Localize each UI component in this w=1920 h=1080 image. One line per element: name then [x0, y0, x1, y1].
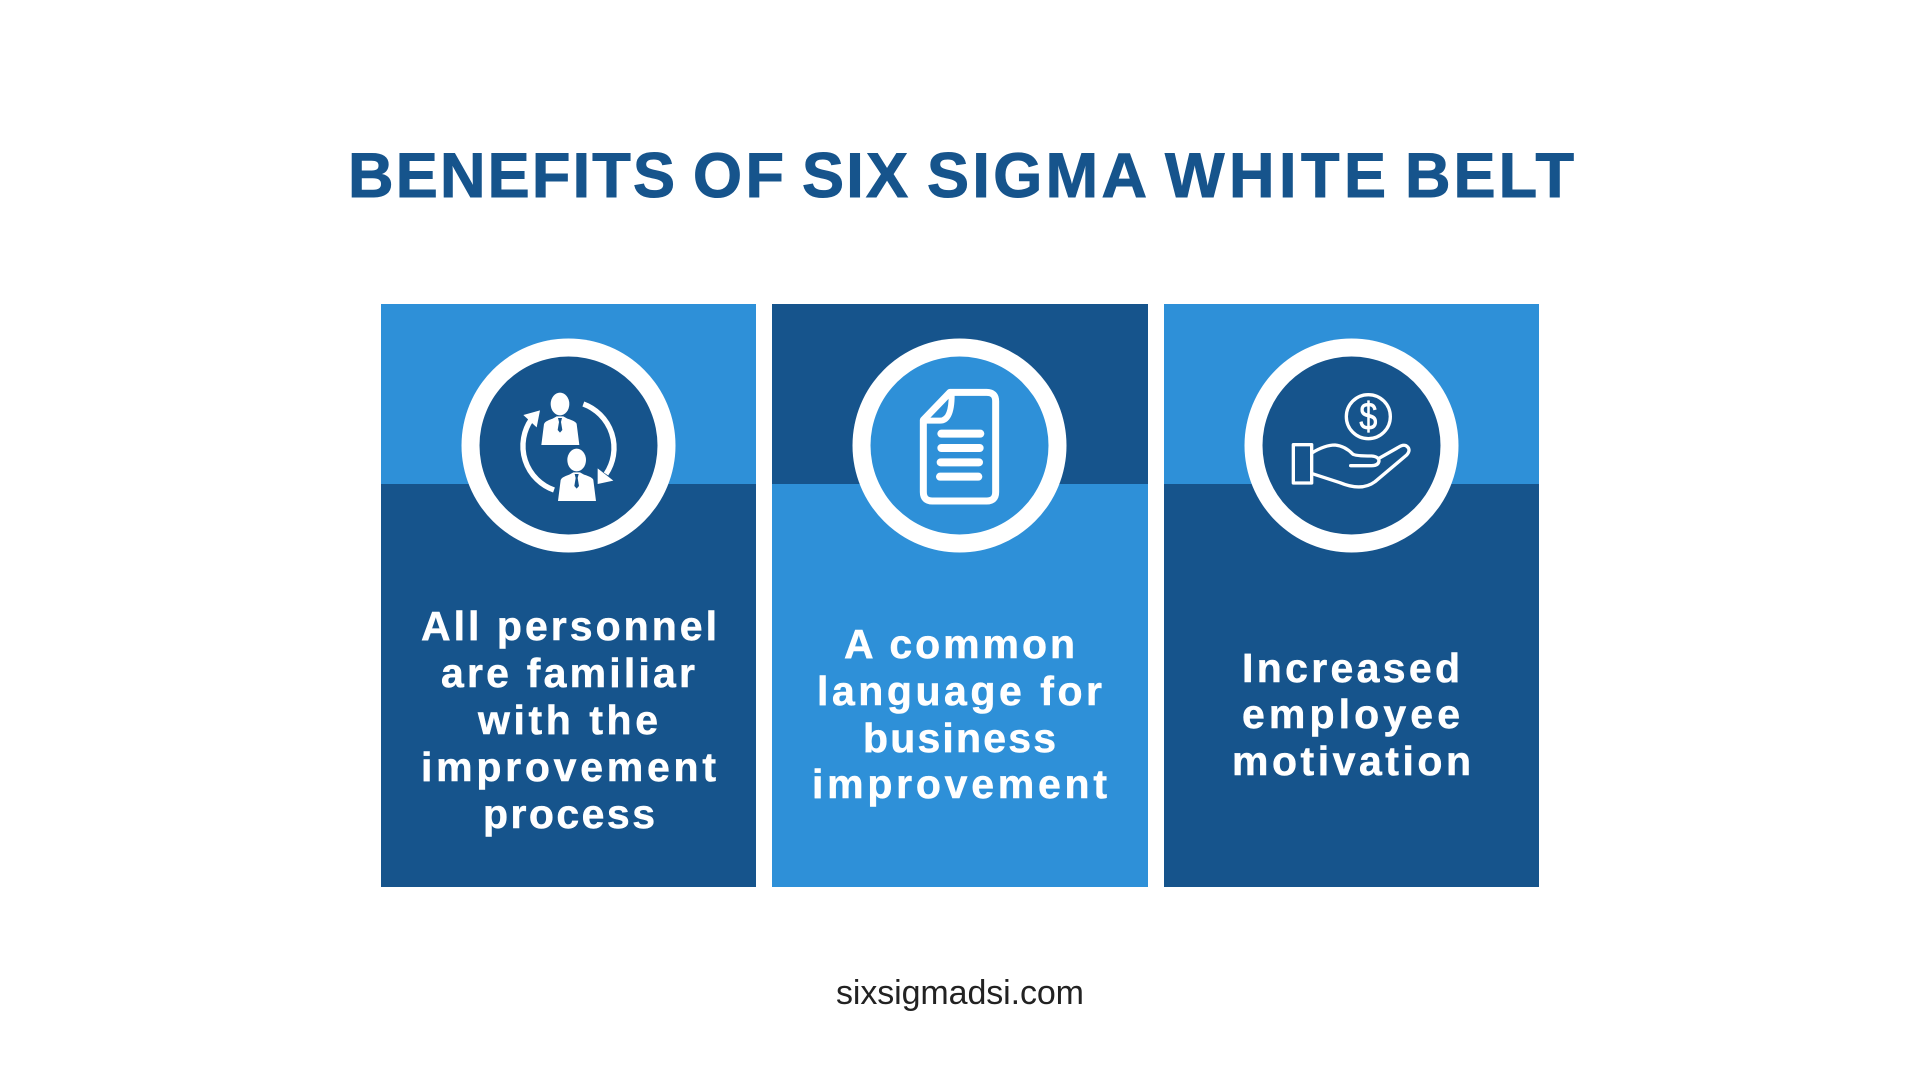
text: all personnel: are familiar: [441, 650, 695, 696]
text: common language: improvement: [812, 761, 1107, 807]
text: employee motivation: motivation: [1232, 738, 1471, 784]
text: all personnel: process: [483, 791, 655, 837]
text: common language: business: [863, 715, 1056, 761]
title: BELT: [1405, 141, 1574, 211]
panel: all personnel: [381, 304, 756, 887]
icon: people exchange in circle: [462, 338, 676, 552]
text: employee motivation: [1232, 645, 1471, 784]
text: all personnel: improvement: [421, 744, 716, 790]
text: employee motivation: Increased: [1242, 645, 1460, 691]
text: all personnel: All personnel: [421, 603, 717, 649]
text: common language: language for: [817, 668, 1102, 714]
text: common language: [812, 621, 1107, 807]
title: SIX: [802, 141, 908, 211]
text: employee motivation: employee: [1242, 691, 1460, 737]
title: WHITE: [1165, 141, 1386, 211]
text: all personnel: [421, 603, 717, 837]
title: BENEFITS: [348, 141, 675, 211]
icon: document in circle: [852, 338, 1066, 552]
title: SIGMA: [927, 141, 1147, 211]
text: common language: A common: [844, 621, 1075, 667]
title: [348, 141, 1574, 211]
icon: hand with coin in circle: [1244, 338, 1458, 552]
icon: hand with coin in circle: $: [1359, 394, 1377, 438]
text: all personnel: with the: [477, 697, 658, 743]
panel: common language: [772, 304, 1148, 887]
footer website: sixsigmadsi.com: [836, 974, 1084, 1012]
title: OF: [693, 141, 784, 211]
panel: employee motivation: [1164, 304, 1539, 887]
